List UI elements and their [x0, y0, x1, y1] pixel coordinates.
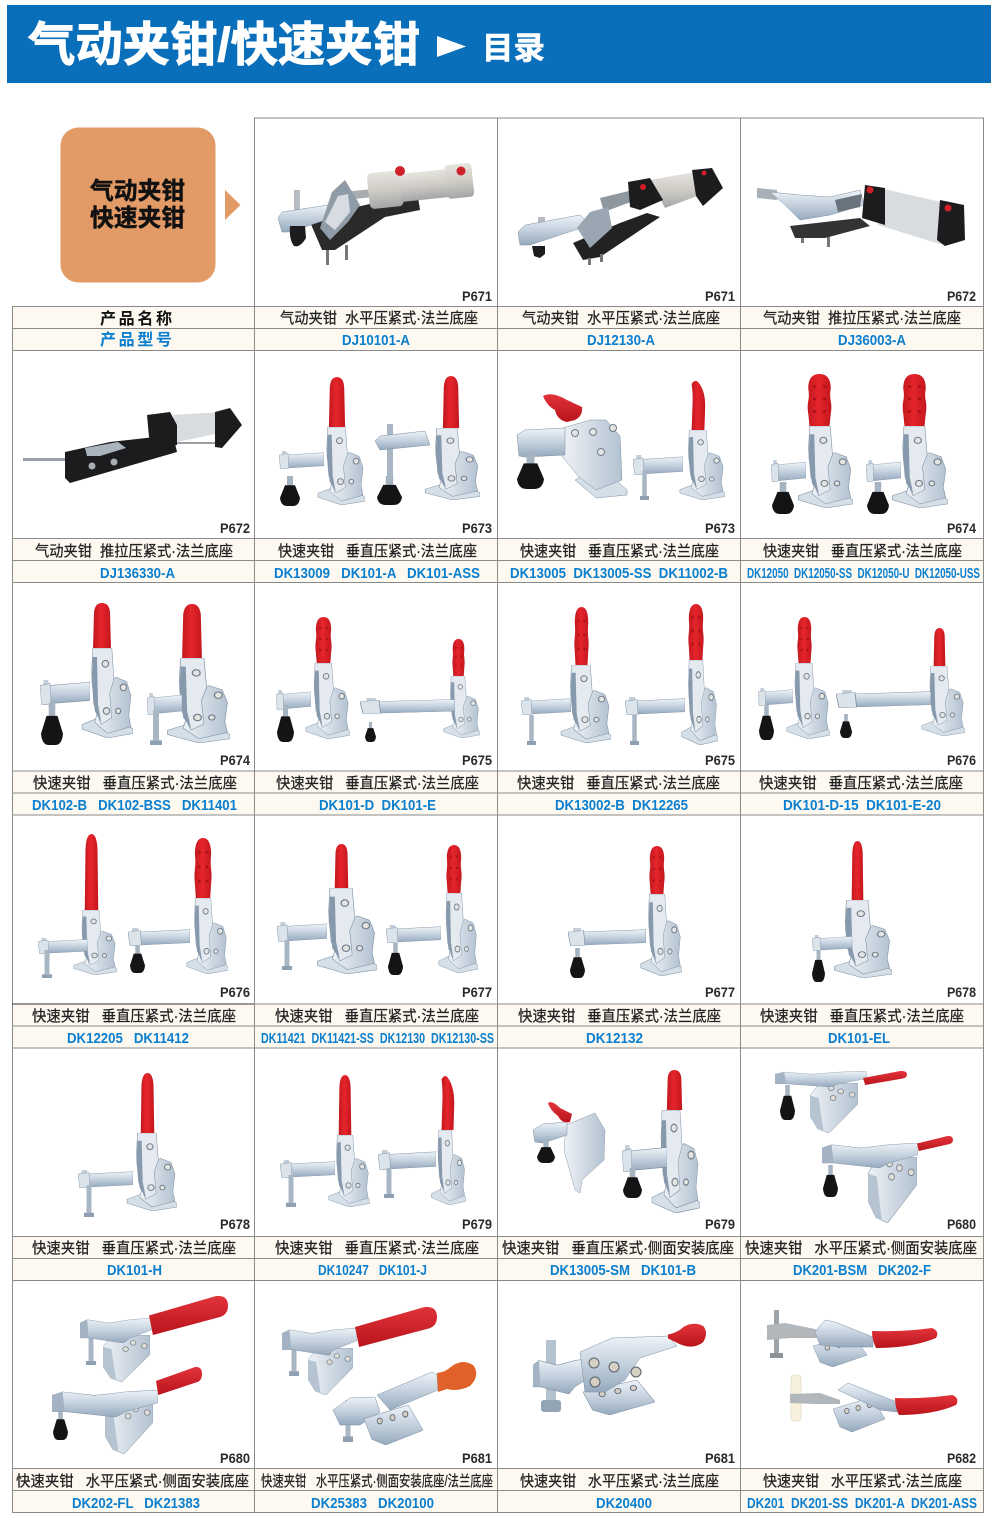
product name: 快速夹钳 水平压紧式·侧面安装底座 [16, 1473, 249, 1490]
panel: DJ136330-A [12, 350, 254, 582]
panel: DK12050 series [740, 350, 984, 582]
product name: 快速夹钳 垂直压紧式·法兰底座 [32, 1240, 236, 1257]
panel: DJ10101-A [254, 118, 498, 350]
product model: DK13009 DK101-A DK101-ASS [274, 565, 480, 582]
clamp image: DK21383 [52, 1367, 202, 1454]
product name: 快速夹钳 垂直压紧式·法兰底座 [33, 775, 237, 792]
panel: DK101-EL [740, 815, 984, 1048]
clamp image: DK101-J [378, 1076, 466, 1205]
product model [254, 1490, 498, 1512]
label: product name: 产品名称 [100, 310, 172, 328]
product model [254, 560, 498, 582]
product name: 快速夹钳 垂直压紧式·法兰底座 [759, 775, 963, 792]
panel: DJ36003-A [740, 118, 984, 350]
product model: DK202-FL DK21383 [72, 1495, 200, 1512]
page reference: P672 [947, 288, 976, 304]
product model: DK25383 DK20100 [311, 1495, 434, 1512]
panel: DK201-BSM DK202-F [740, 1048, 984, 1280]
clamp image: DK10247 [280, 1075, 370, 1207]
clamp image: DK12050 [771, 374, 853, 514]
page reference: P679 [462, 1216, 492, 1232]
product model [12, 1490, 254, 1512]
panel: DK13002-B DK12265 [498, 582, 740, 815]
clamp image: DK11412 [128, 838, 228, 974]
category title line 2: 快速夹钳 [90, 205, 185, 232]
product name [254, 1004, 498, 1026]
product model: DK13005 DK13005-SS DK11002-B [510, 565, 728, 582]
product name [498, 771, 740, 793]
clamp image: DK25383 [282, 1307, 437, 1395]
label: product model [12, 328, 254, 350]
clamp image: DK12205 [38, 834, 117, 978]
clamp image: DK201-BSM [775, 1071, 907, 1133]
product name [254, 306, 498, 328]
product model [498, 1258, 740, 1280]
label: product name [12, 306, 254, 328]
row header: product name and model [12, 306, 254, 350]
product name: 快速夹钳 水平压紧式·侧面安装底座/法兰底座 [261, 1473, 493, 1490]
product model [740, 1026, 984, 1048]
product model: DJ136330-A [100, 565, 175, 582]
product model: DK12132 [586, 1030, 643, 1047]
clamp image: DK101-B [622, 1070, 700, 1213]
product name: 快速夹钳 垂直压紧式·侧面安装底座 [502, 1240, 734, 1257]
product name [254, 1236, 498, 1258]
page reference: P677 [462, 984, 492, 1000]
clamp image: DK12265 [625, 604, 718, 745]
product model [12, 1258, 254, 1280]
product name: 快速夹钳 垂直压紧式·法兰底座 [32, 1008, 236, 1025]
product name: 快速夹钳 垂直压紧式·法兰底座 [518, 1008, 721, 1025]
product model: DJ36003-A [838, 332, 906, 349]
product name: 快速夹钳 水平压紧式·法兰底座 [763, 1473, 962, 1490]
clamp image: DK20400 [533, 1324, 706, 1415]
page reference: P675 [705, 752, 735, 768]
page reference: P674 [947, 520, 976, 536]
clamp image: DK101-E-20 [836, 628, 965, 738]
product name [498, 1004, 740, 1026]
product name [498, 306, 740, 328]
product name [12, 538, 254, 560]
product model [254, 793, 498, 815]
product model: DK13002-B DK12265 [555, 797, 688, 814]
page reference: P671 [462, 288, 492, 304]
page reference: P678 [947, 984, 976, 1000]
clamp image: DK11401 [147, 604, 230, 745]
page reference: P682 [947, 1450, 976, 1466]
clamp image: DK101-EL [812, 841, 892, 982]
clamp image: DK202-F [822, 1136, 953, 1223]
product name: 气动夹钳 水平压紧式·法兰底座 [522, 310, 720, 327]
product model [498, 1026, 740, 1048]
panel: DK11421 series [254, 815, 498, 1048]
product name [740, 1004, 984, 1026]
product model: DK12205 DK11412 [67, 1030, 189, 1047]
product model: DK201-BSM DK202-F [793, 1262, 931, 1279]
product name [740, 538, 984, 560]
page reference: P680 [220, 1450, 250, 1466]
product model [498, 1490, 740, 1512]
product model: DK101-D-15 DK101-E-20 [783, 797, 941, 814]
clamp image: pneumatic horizontal black [518, 168, 723, 265]
clamp image: DK101-D-15 [758, 617, 830, 740]
page reference: P677 [705, 984, 735, 1000]
clamp image: DK11002-B [633, 381, 725, 500]
clamp image: DK101-D [276, 617, 350, 742]
product name: 快速夹钳 垂直压紧式·法兰底座 [276, 775, 479, 792]
product model [254, 1026, 498, 1048]
product name [12, 1236, 254, 1258]
clamp image: DK202-FL [80, 1296, 228, 1382]
page reference: P680 [947, 1216, 976, 1232]
product name [254, 538, 498, 560]
product model: DK101-D DK101-E [319, 797, 436, 814]
product name [12, 771, 254, 793]
product model [740, 793, 984, 815]
panel: DK13009 DK101-A DK101-ASS [254, 350, 498, 582]
product model: DJ10101-A [342, 332, 410, 349]
page reference: P679 [705, 1216, 735, 1232]
product name [498, 1468, 740, 1490]
panel: DK201 series [740, 1280, 984, 1512]
subtitle: 目录 [482, 31, 545, 66]
product name: 快速夹钳 垂直压紧式·法兰底座 [275, 1008, 479, 1025]
clamp image: DK13002-B [521, 607, 611, 745]
product model [498, 560, 740, 582]
arrow to product grid [225, 190, 240, 220]
panel: DK20400 [498, 1280, 740, 1512]
panel: DK101-H [12, 1048, 254, 1280]
page reference: P681 [705, 1450, 735, 1466]
panel: DK25383 DK20100 [254, 1280, 498, 1512]
page reference: P672 [220, 520, 250, 536]
clamp image: DK201-A [790, 1375, 957, 1432]
panel: DK101-D DK101-E [254, 582, 498, 815]
product name: 气动夹钳 水平压紧式·法兰底座 [280, 310, 478, 327]
clamp image: DK102-B [40, 603, 133, 745]
category box [60, 128, 216, 282]
product model [12, 793, 254, 815]
product model [498, 328, 740, 350]
product name [740, 771, 984, 793]
page reference: P671 [705, 288, 735, 304]
product name: 快速夹钳 垂直压紧式·法兰底座 [275, 1240, 479, 1257]
product model: DK10247 DK101-J [318, 1262, 427, 1279]
product model: DK101-H [107, 1262, 162, 1279]
page reference: P674 [220, 752, 250, 768]
product model [740, 328, 984, 350]
clamp image: DK13005 low profile [517, 394, 627, 498]
product model: DK102-B DK102-BSS DK11401 [32, 797, 237, 814]
clamp image: DK12132 [568, 846, 682, 978]
panel: DK202-FL DK21383 [12, 1280, 254, 1512]
page reference: P673 [462, 520, 492, 536]
product model: DK13005-SM DK101-B [550, 1262, 696, 1279]
header banner [7, 5, 991, 83]
page reference: P678 [220, 1216, 250, 1232]
title: 气动夹钳/快速夹钳 [28, 18, 420, 71]
product model [254, 328, 498, 350]
page reference: P681 [462, 1450, 492, 1466]
product name [12, 1004, 255, 1026]
product model: DK20400 [596, 1495, 652, 1512]
clamp image: DK101-H [78, 1073, 177, 1217]
clamp image: DK12130 [386, 845, 478, 975]
clamp image: DK12050-U [866, 374, 948, 514]
clamp image: pneumatic push-pull [757, 185, 965, 247]
product name [254, 771, 498, 793]
panel: DK12205 DK11412 [12, 815, 255, 1048]
clamp image: DK13009 [279, 377, 365, 506]
clamp image: DK201 [767, 1310, 937, 1367]
panel: DK13005 DK13005-SS DK11002-B [498, 350, 740, 582]
product model [12, 560, 254, 582]
panel: DJ12130-A [498, 118, 740, 350]
product model [740, 1258, 984, 1280]
product name [498, 538, 740, 560]
clamp image: DK20100 [333, 1362, 476, 1445]
panel: DK102-B DK102-BSS DK11401 [12, 582, 254, 815]
product name [254, 1468, 498, 1490]
product name: 快速夹钳 垂直压紧式·法兰底座 [517, 775, 720, 792]
product name: 快速夹钳 垂直压紧式·法兰底座 [278, 543, 477, 560]
panel: DK101-D-15 DK101-E-20 [740, 582, 984, 815]
product model [254, 1258, 498, 1280]
clamp image: pneumatic push-pull black [23, 408, 242, 483]
page reference: P676 [220, 984, 250, 1000]
page reference: P673 [705, 520, 735, 536]
icon: title arrow [437, 36, 466, 57]
product name: 气动夹钳 推拉压紧式·法兰底座 [763, 310, 961, 327]
clamp image: pneumatic horizontal [278, 163, 475, 265]
product name: 快速夹钳 水平压紧式·法兰底座 [520, 1473, 719, 1490]
product name: 快速夹钳 垂直压紧式·法兰底座 [760, 1008, 964, 1025]
product name [740, 306, 984, 328]
product name: 快速夹钳 水平压紧式·侧面安装底座 [745, 1240, 977, 1257]
page reference: P675 [462, 752, 492, 768]
product name: 快速夹钳 垂直压紧式·法兰底座 [520, 543, 719, 560]
clamp image: DK13005-SM [533, 1102, 605, 1193]
product model [12, 1026, 254, 1048]
product model [498, 793, 740, 815]
product name: 快速夹钳 垂直压紧式·法兰底座 [763, 543, 962, 560]
clamp image: DK101-A [375, 376, 480, 505]
product model: DJ12130-A [587, 332, 655, 349]
product model: DK11421 DK11421-SS DK12130 DK12130-SS [261, 1030, 494, 1047]
panel: DK12132 [498, 815, 740, 1048]
clamp image: DK11421 [277, 844, 377, 974]
label: product model: 产品型号 [100, 331, 172, 349]
category title: 气动夹钳 [90, 178, 185, 205]
product name: 气动夹钳 推拉压紧式·法兰底座 [35, 543, 233, 560]
panel: DK13005-SM DK101-B [498, 1048, 740, 1280]
clamp image: DK101-E [360, 639, 480, 742]
product name [740, 1468, 984, 1490]
page reference: P676 [947, 752, 976, 768]
product model: DK101-EL [828, 1030, 890, 1047]
panel: DK10247 DK101-J [254, 1048, 498, 1280]
